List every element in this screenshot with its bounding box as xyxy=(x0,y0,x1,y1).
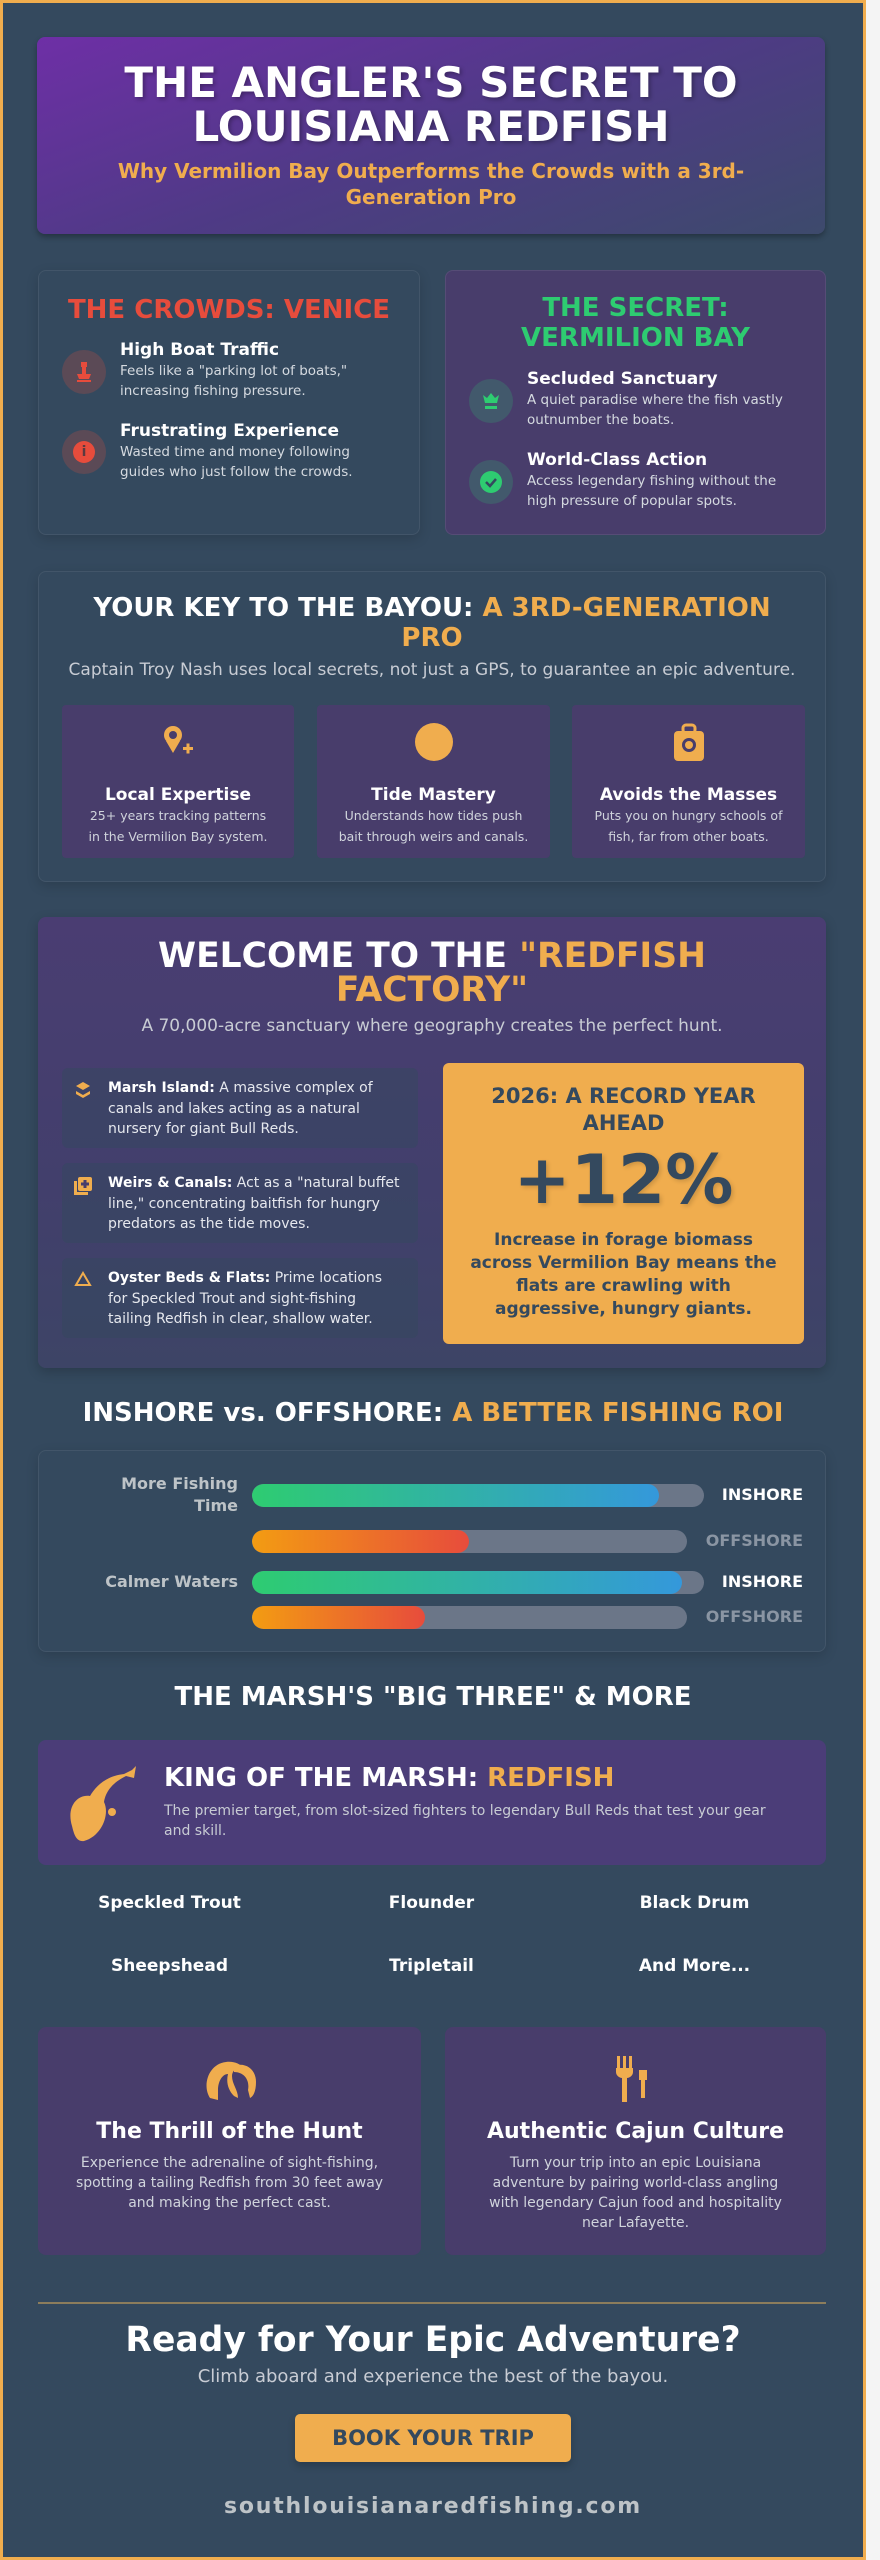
icon: check xyxy=(469,460,513,504)
item: high boat traffic: High Boat Traffic xyxy=(120,340,279,360)
panel: crowds venice xyxy=(38,270,420,535)
card: tide mastery xyxy=(317,705,550,858)
title: THE ANGLER'S SECRET TO xyxy=(124,58,738,107)
item: world-class action: Access legendary fishing without the xyxy=(527,473,776,489)
button: book your trip: BOOK YOUR TRIP xyxy=(332,2426,534,2450)
item: secluded sanctuary xyxy=(469,369,783,428)
item: world-class action: high pressure of popular spots. xyxy=(527,493,737,509)
callout: record year xyxy=(443,1063,804,1344)
item: secluded sanctuary: Secluded Sanctuary xyxy=(527,369,718,389)
card: avoids the masses: Puts you on hungry schools of xyxy=(595,808,782,823)
button: book your trip xyxy=(295,2414,571,2462)
panel: secret vermilion bay xyxy=(445,270,826,535)
heading crowds: THE CROWDS: VENICE xyxy=(68,295,390,325)
callout: record year: Increase in forage biomass across Vermilion Bay means the flats are crawling with aggressive, hungry giants. xyxy=(470,1230,777,1319)
icon: moon xyxy=(415,723,453,761)
card: local expertise: Local Expertise xyxy=(105,785,251,805)
subtitle: Why Vermilion Bay Outperforms the Crowds with a 3rd-Generation Pro xyxy=(118,159,744,209)
icon: camera xyxy=(674,724,704,761)
species grid: Black Drum xyxy=(640,1893,749,1913)
card: thrill of the hunt xyxy=(38,2027,421,2255)
card: avoids the masses: Avoids the Masses xyxy=(600,785,777,805)
item: high boat traffic: increasing fishing pressure. xyxy=(120,383,306,399)
species grid: Speckled Trout xyxy=(98,1893,241,1913)
item: world-class action: World-Class Action xyxy=(527,450,707,470)
icon: info: i xyxy=(82,444,86,460)
species grid: Sheepshead xyxy=(111,1956,228,1976)
bar chart: Time xyxy=(194,1496,238,1515)
heading factory xyxy=(158,936,706,1010)
heading secret xyxy=(521,293,750,353)
card: cajun culture xyxy=(445,2027,826,2255)
species grid: Flounder xyxy=(389,1893,474,1913)
heading secret: THE SECRET: xyxy=(542,293,729,323)
card: tide mastery: bait through weirs and canals. xyxy=(339,829,528,844)
card: local expertise: in the Vermilion Bay system. xyxy=(89,829,267,844)
icon: sanctuary xyxy=(469,379,513,423)
bar chart: INSHORE xyxy=(722,1485,803,1504)
icon: hunt xyxy=(206,2062,256,2100)
bar chart xyxy=(38,1450,826,1652)
item: oyster beds: Oyster Beds & Flats: Prime locations for Speckled Trout and sight-fishing tailing Redfish in clear, shallow water. xyxy=(108,1270,382,1327)
website url: southlouisianaredfishing.com xyxy=(224,2494,642,2519)
item: frustrating experience: Wasted time and money following xyxy=(120,444,350,460)
panel: key to the bayou xyxy=(38,571,826,882)
item: high boat traffic: Feels like a "parking lot of boats," xyxy=(120,363,347,379)
bar chart: OFFSHORE xyxy=(706,1531,803,1550)
heading factory: FACTORY" xyxy=(336,970,528,1010)
item: frustrating experience: guides who just follow the crowds. xyxy=(120,464,353,480)
cta heading: Ready for Your Epic Adventure? xyxy=(125,2320,741,2360)
item: frustrating experience xyxy=(62,421,353,480)
item: marsh island xyxy=(62,1068,418,1148)
card: tide mastery: Tide Mastery xyxy=(371,785,496,805)
bar chart: OFFSHORE xyxy=(706,1607,803,1626)
header xyxy=(37,37,825,234)
bar chart: Calmer Waters xyxy=(105,1572,238,1591)
heading: inshore vs offshore: INSHORE vs. OFFSHORE: A BETTER FISHING ROI xyxy=(83,1398,783,1428)
card: cajun culture: Authentic Cajun Culture xyxy=(487,2119,784,2144)
icon: triangle xyxy=(74,1271,92,1286)
panel: king of the marsh xyxy=(38,1740,826,1865)
icon: info xyxy=(62,430,106,474)
card: tide mastery: Understands how tides push xyxy=(345,808,522,823)
heading secret: VERMILION BAY xyxy=(521,323,750,353)
item: marsh island: Marsh Island: A massive complex of canals and lakes acting as a natural nursery for giant Bull Reds. xyxy=(108,1080,373,1137)
heading: big three: THE MARSH'S "BIG THREE" & MORE xyxy=(174,1682,692,1712)
title: LOUISIANA REDFISH xyxy=(192,102,669,151)
card: cajun culture: Turn your trip into an epic Louisiana adventure by pairing world-class angling with legendary Cajun food and hospitality near Lafayette. xyxy=(489,2155,782,2231)
panel: king of the marsh: The premier target, from slot-sized fighters to legendary Bull Reds that test your gear and skill. xyxy=(164,1803,766,1839)
callout: record year: AHEAD xyxy=(583,1111,664,1135)
icon: layers xyxy=(76,1082,90,1098)
subtitle factory: A 70,000-acre sanctuary where geography creates the perfect hunt. xyxy=(141,1016,723,1036)
title xyxy=(124,58,739,151)
stat: +12%: +12% xyxy=(514,1141,733,1220)
heading key: PRO xyxy=(401,623,463,653)
heading key: YOUR KEY TO THE BAYOU: A 3RD-GENERATION xyxy=(93,593,771,623)
card: avoids the masses xyxy=(572,705,805,858)
card: avoids the masses: fish, far from other boats. xyxy=(608,829,769,844)
title king: KING OF THE MARSH: REDFISH xyxy=(164,1763,614,1793)
callout: record year: 2026: A RECORD YEAR xyxy=(491,1084,756,1108)
panel: redfish factory xyxy=(38,917,826,1368)
icon: fork knife xyxy=(616,2056,647,2102)
heading key xyxy=(93,593,771,653)
bar chart: INSHORE xyxy=(722,1572,803,1591)
item: oyster beds xyxy=(62,1258,418,1338)
item: weirs canals: Weirs & Canals: Act as a "natural buffet line," concentrating baitfish for hungry predators as the tide moves. xyxy=(108,1175,400,1232)
item: world-class action xyxy=(469,450,776,509)
bar chart: More Fishing xyxy=(121,1474,238,1493)
item: high boat traffic xyxy=(62,340,347,399)
icon: redfish xyxy=(70,1766,136,1842)
species grid: And More... xyxy=(639,1956,750,1976)
card: local expertise: 25+ years tracking patterns xyxy=(90,808,266,823)
card: thrill of the hunt: Experience the adrenaline of sight-fishing, spotting a tailing Redfish from 30 feet away and making the perfect cast. xyxy=(76,2155,383,2211)
item: secluded sanctuary: A quiet paradise where the fish vastly xyxy=(527,392,783,408)
card: thrill of the hunt: The Thrill of the Hunt xyxy=(96,2119,363,2144)
icon: plus box xyxy=(74,1177,92,1195)
card: local expertise xyxy=(62,705,294,858)
icon: expert pin xyxy=(164,726,193,754)
subtitle key: Captain Troy Nash uses local secrets, not just a GPS, to guarantee an epic adventure. xyxy=(69,660,795,680)
heading factory: WELCOME TO THE "REDFISH xyxy=(158,936,706,976)
item: secluded sanctuary: outnumber the boats. xyxy=(527,412,674,428)
item: weirs canals xyxy=(62,1163,418,1243)
cta subtitle: Climb aboard and experience the best of the bayou. xyxy=(198,2366,668,2387)
species grid: Tripletail xyxy=(389,1956,474,1976)
item: frustrating experience: Frustrating Experience xyxy=(120,421,339,441)
icon: boat xyxy=(62,350,106,394)
species grid xyxy=(98,1893,750,1976)
